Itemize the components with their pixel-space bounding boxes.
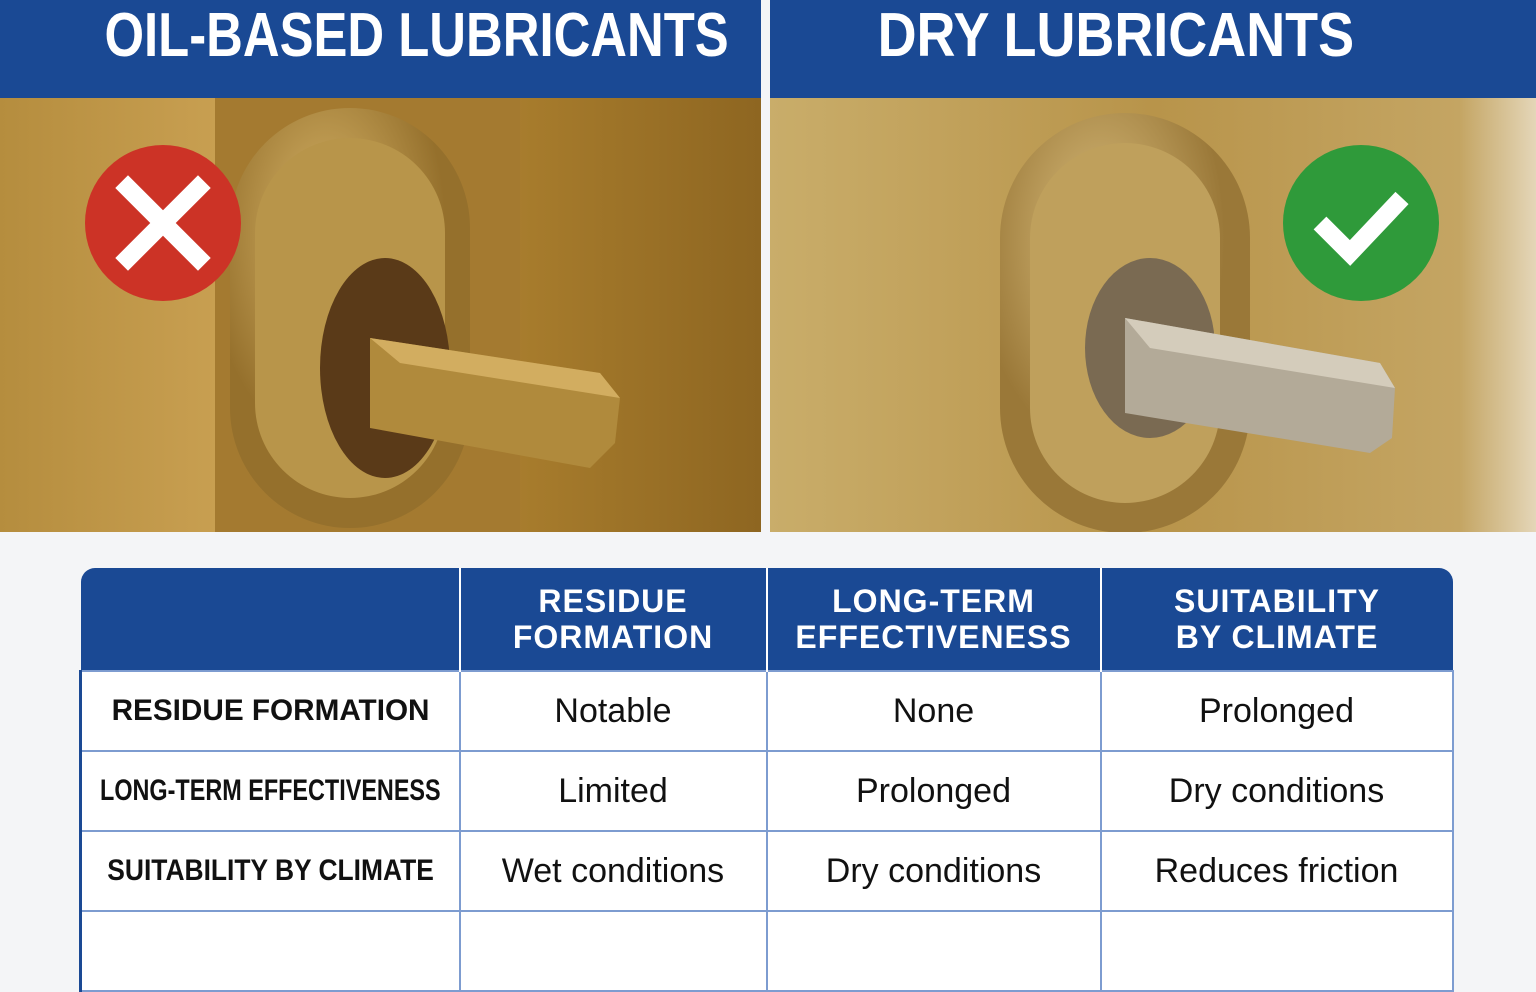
row: long-term [82,752,1452,830]
comparison table [79,568,1454,992]
table header row: FORMATION [513,619,713,655]
table header row: BY CLIMATE [1176,619,1378,655]
row: climate [82,832,1452,910]
row: climate: Dry conditions [826,852,1041,890]
row: climate: SUITABILITY BY CLIMATE [107,854,434,887]
row: climate: Reduces friction [1155,852,1398,890]
row: residue: None [893,692,974,730]
table header row [81,568,1453,990]
row: residue: RESIDUE FORMATION [111,694,429,727]
icon: red x [85,145,241,301]
photo: dry lock [770,98,1536,532]
icon: green check [1283,145,1439,301]
row: residue: Notable [554,692,672,730]
row: residue [82,672,1452,750]
row: residue: Prolonged [1199,692,1354,730]
row: long-term: LONG-TERM EFFECTIVENESS [100,774,441,807]
table header row: SUITABILITY [1174,583,1380,619]
header: dry: DRY LUBRICANTS [878,1,1354,70]
table header row: RESIDUE [538,583,688,619]
row: long-term: Prolonged [856,772,1011,810]
photo: oil-based lock [0,98,761,532]
row: long-term: Limited [558,772,668,810]
row: climate: Wet conditions [502,852,724,890]
header: oil-based [0,0,761,98]
row: long-term: Dry conditions [1169,772,1384,810]
header: oil-based: OIL-BASED LUBRICANTS [104,1,729,70]
table header row: EFFECTIVENESS [795,619,1072,655]
header: dry [770,0,1536,98]
table header row: LONG-TERM [832,583,1035,619]
